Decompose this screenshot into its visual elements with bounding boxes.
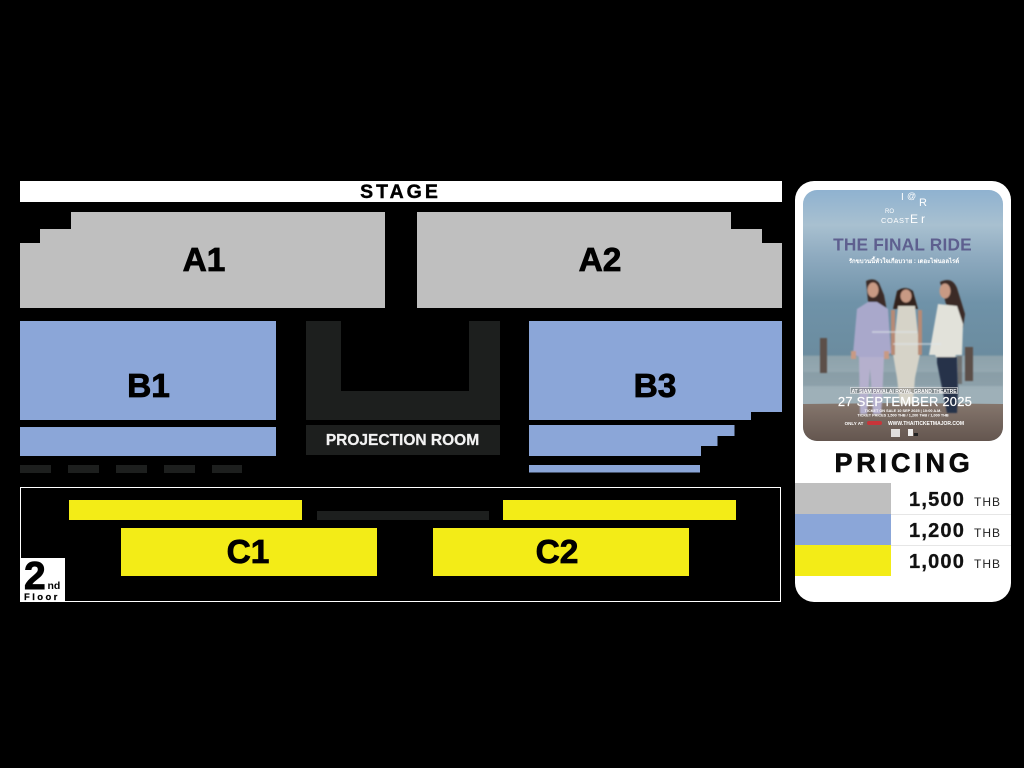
section C1: C1: [227, 534, 269, 571]
poster ticket details: WWW.THAITICKETMAJOR.COM: [888, 421, 964, 427]
unavailable block behind projection room: [306, 321, 500, 420]
section B3: B3: [634, 368, 676, 405]
pricing panel: [795, 181, 1011, 602]
poster sea band: [803, 372, 1003, 386]
unavailable row centre: [317, 511, 489, 520]
price row 1200: [795, 514, 1011, 545]
projection room: [306, 425, 500, 455]
poster figures: [851, 279, 965, 414]
price row 1000: THB: [974, 557, 1001, 571]
price row 1000: [795, 545, 1011, 576]
section A2: [417, 212, 782, 308]
price row 1200: 1,200: [909, 520, 965, 542]
2nd floor badge: 2: [24, 555, 46, 598]
section C2: [433, 528, 689, 576]
poster logo: R: [919, 197, 927, 209]
2nd floor badge: nd: [48, 580, 60, 592]
stage: STAGE: [360, 181, 441, 203]
price row 1500: 1,500: [909, 489, 965, 511]
figure left: [851, 279, 891, 414]
poster title: THE FINAL RIDE: [833, 234, 972, 254]
poster: [803, 190, 1003, 441]
poster logo: RO: [885, 209, 894, 215]
price row 1200: THB: [974, 526, 1001, 540]
section B3: [529, 321, 782, 472]
poster logo: @: [907, 191, 916, 201]
C row left: [69, 500, 302, 520]
2nd floor badge: Floor: [24, 592, 60, 603]
section C1: [121, 528, 377, 576]
poster posts: [820, 338, 973, 384]
poster sand: [803, 403, 1003, 441]
section A1: [20, 212, 385, 308]
poster logo: COAST: [881, 216, 910, 225]
figure middle: [891, 288, 922, 404]
price row 1000: 1,000: [909, 551, 965, 573]
poster caption marks: [872, 331, 941, 345]
2nd floor badge: [21, 555, 65, 603]
pricing heading: PRICING: [834, 448, 974, 478]
poster ticket details: TICKET PRICES 1,500 THB / 1,200 THB / 1,000 THB: [857, 414, 949, 418]
unavailable seats row: [20, 465, 242, 473]
price row 1500: THB: [974, 495, 1001, 509]
poster sponsor logos: [891, 429, 918, 437]
poster logo: I: [901, 192, 904, 203]
stage: [20, 181, 782, 203]
C row right: [503, 500, 736, 520]
poster date: 27 SEPTEMBER 2025: [838, 394, 972, 409]
poster ticket details: ONLY AT: [845, 421, 864, 426]
price row 1500: [795, 483, 1001, 514]
section A2: A2: [579, 242, 621, 279]
poster ticket details: [844, 410, 964, 425]
section A1: A1: [183, 242, 225, 279]
2nd floor panel: [20, 488, 780, 603]
projection room: PROJECTION ROOM: [326, 432, 479, 449]
poster ticket logo: [867, 421, 882, 425]
poster ticket details: TICKET ON SALE 10 SEP 2025 | 10:00 A.M.: [865, 409, 941, 413]
poster logo: Er: [910, 212, 928, 226]
poster logo: [881, 192, 926, 223]
poster venue: AT SIAM PAVALAI ROYAL GRAND THEATRE: [851, 389, 957, 395]
poster subtitle: รักขบวนนี้หัวใจเกือบวาย : เดอะไฟนอลไรด์: [849, 255, 959, 265]
figure right: [929, 280, 965, 413]
section B1: B1: [127, 368, 170, 405]
section C2: C2: [536, 534, 578, 571]
section B1: [20, 321, 276, 456]
